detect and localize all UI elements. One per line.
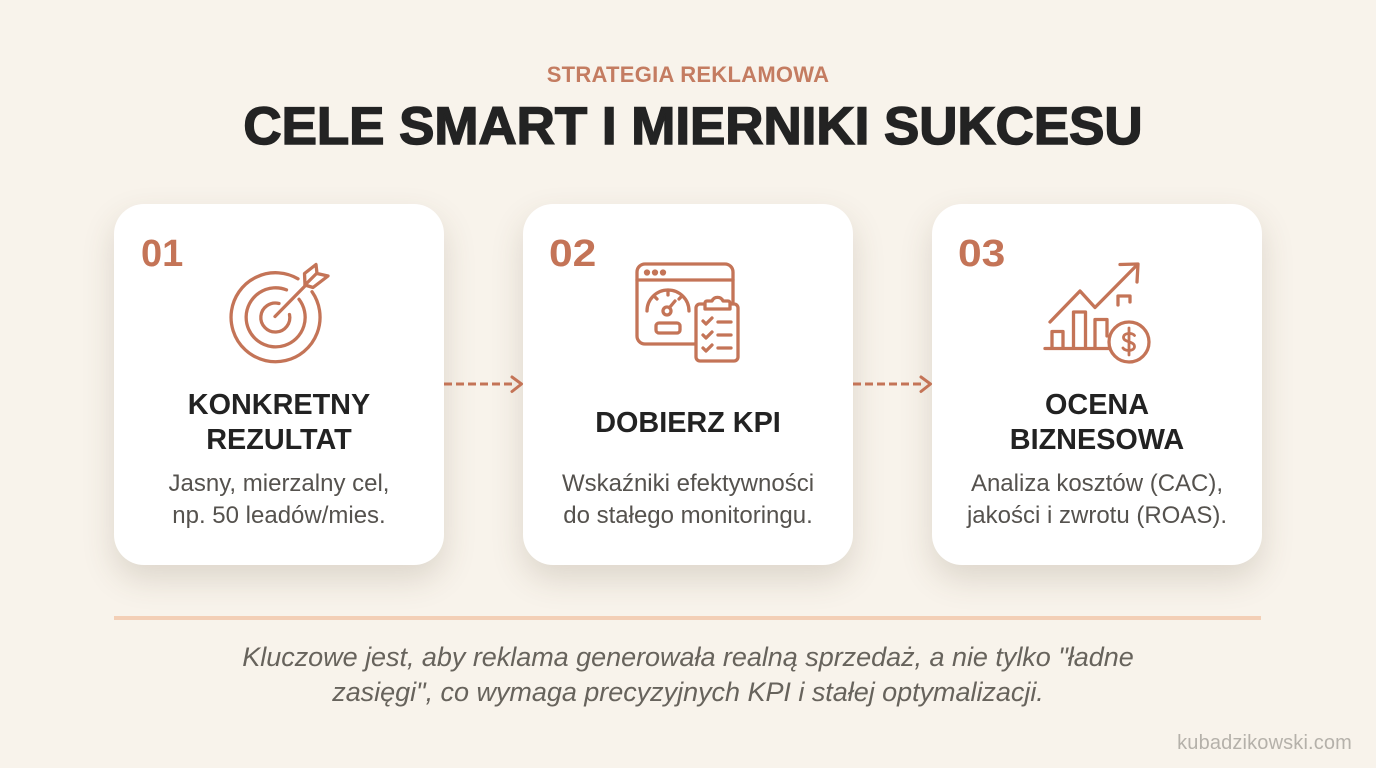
card 3 text (966, 470, 1227, 528)
card 1 heading: KONKRETNY (188, 389, 370, 421)
eyebrow heading: STRATEGIA REKLAMOWA (547, 62, 829, 87)
card 2 heading: DOBIERZ KPI (595, 407, 781, 439)
card 2 text: Wskaźniki efektywności (562, 470, 814, 497)
icon: target with arrow (231, 264, 328, 362)
card 1 heading: REZULTAT (206, 424, 352, 456)
title: CELE SMART I MIERNIKI SUKCESU (243, 97, 1143, 156)
card 1 text: np. 50 leadów/mies. (172, 502, 386, 528)
watermark: kubadzikowski.com (1177, 732, 1352, 754)
closing note: Kluczowe jest, aby reklama generowała realną sprzedaż, a nie tylko "ładne (242, 642, 1134, 672)
icon: dashboard and clipboard (637, 264, 738, 361)
card 3 heading (1010, 389, 1184, 456)
card 3 text: jakości i zwrotu (ROAS). (967, 502, 1227, 528)
card 3 heading: BIZNESOWA (1010, 424, 1184, 456)
divider (114, 616, 1261, 620)
card 3 heading: OCENA (1045, 389, 1149, 421)
number 03: 03 (958, 233, 1005, 275)
card 2 text: do stałego monitoringu. (563, 502, 813, 528)
panel: card 2 (523, 204, 853, 565)
panel: card 1 (114, 204, 444, 565)
panel: card 3 (932, 204, 1262, 565)
card 3 text: Analiza kosztów (CAC), (971, 470, 1223, 497)
card 1 text (168, 470, 389, 528)
arrow: step 1 to 2 (444, 377, 522, 392)
number 02: 02 (549, 233, 596, 275)
number 01: 01 (141, 233, 183, 275)
closing note: zasięgi", co wymaga precyzyjnych KPI i stałej optymalizacji. (332, 677, 1044, 707)
icon: growth chart with coin (1045, 264, 1149, 362)
card 2 text (562, 470, 814, 528)
arrow: step 2 to 3 (853, 377, 930, 392)
closing note (242, 642, 1134, 707)
card 1 heading (188, 389, 370, 456)
card 1 text: Jasny, mierzalny cel, (169, 470, 389, 497)
